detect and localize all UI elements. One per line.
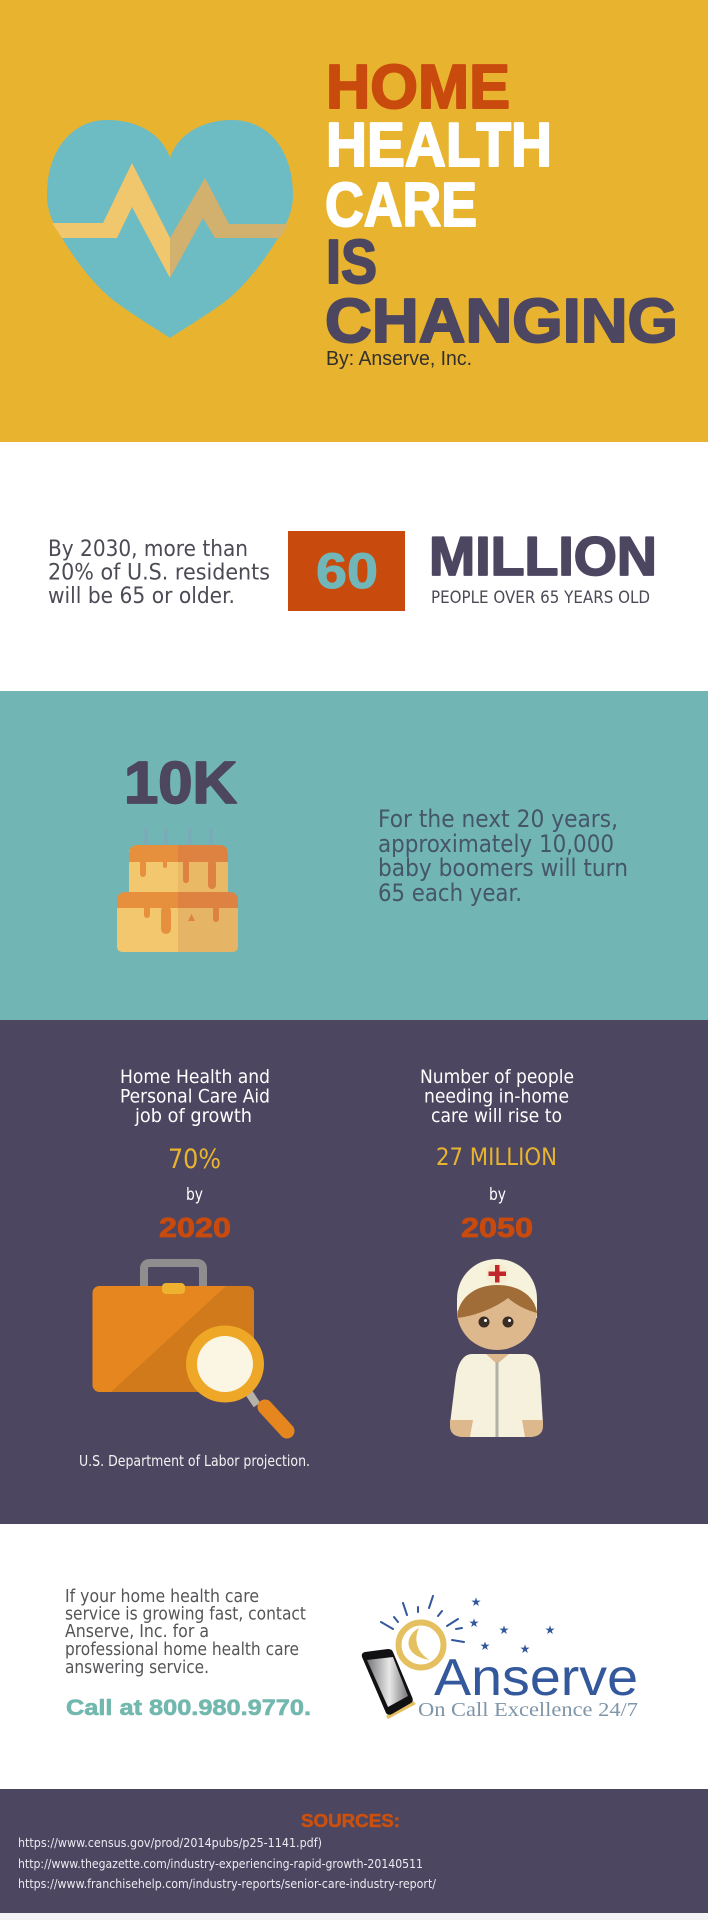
icon: birthday cake (117, 827, 238, 952)
text block: job growth (120, 1066, 270, 1127)
icon: sun and crescent moon (381, 1596, 464, 1668)
text block: 10,000 boomers: For the next 20 years, (378, 805, 618, 833)
logo: Anserve (362, 1595, 638, 1721)
source list: https://www.census.gov/prod/2014pubs/p25-1141.pdf) (18, 1836, 322, 1850)
icon: stars: ★ (545, 1623, 555, 1637)
text block: 10,000 boomers: 65 each year. (378, 879, 522, 907)
footnote: labor projection: U.S. Department of Labor projection. (79, 1452, 310, 1470)
source list: http://www.thegazette.com/industry-experiencing-rapid-growth-20140511 (18, 1857, 423, 1871)
text block: in-home care: needing in-home (424, 1086, 569, 1108)
title: CARE (325, 171, 477, 240)
stat: 2020: 2020 (159, 1212, 231, 1243)
text block: job growth: Home Health and (120, 1066, 270, 1088)
tagline: On Call Excellence 24/7 (418, 1699, 638, 1721)
text block: 2030 residents (48, 537, 270, 609)
panel: call to action (0, 1524, 708, 1789)
panel: growth statistics (0, 1020, 708, 1524)
panel: 60 million (0, 442, 708, 691)
stat word: million: MILLION (429, 525, 657, 587)
panel: sources (0, 1789, 708, 1920)
text block: contact Anserve: service is growing fast, contact (65, 1604, 306, 1624)
text block: 2030 residents: By 2030, more than (48, 537, 248, 562)
text block: 2030 residents: 20% of U.S. residents (48, 560, 270, 586)
text block: in-home care: Number of people (420, 1066, 574, 1088)
icon: stars: ★ (499, 1623, 509, 1637)
text block: job growth: Personal Care Aid (120, 1086, 270, 1108)
stat: 70%: 70% (168, 1144, 221, 1175)
text: by: by (489, 1185, 506, 1205)
stat: 27 million: 27 MILLION (436, 1143, 557, 1171)
icon: stars: ★ (469, 1616, 479, 1630)
text block: contact Anserve (65, 1586, 306, 1678)
icon: stars: ★ (471, 1595, 481, 1609)
icon: stars: ★ (480, 1639, 490, 1653)
stat box: 60: 60 (316, 543, 378, 599)
byline: By: Anserve, Inc. (326, 348, 472, 370)
title (325, 53, 678, 356)
icon: stars: ★ (520, 1642, 530, 1656)
text block: contact Anserve: answering service. (65, 1657, 209, 1678)
stat: 2050: 2050 (461, 1212, 533, 1243)
text block: 10,000 boomers (378, 805, 628, 907)
source list (18, 1836, 437, 1891)
icon: briefcase with magnifier (92, 1263, 287, 1431)
wordmark: Anserve (434, 1649, 638, 1707)
stat box: 60 (288, 531, 405, 611)
panel: 10K baby boomers (0, 691, 708, 1020)
icon: nurse (450, 1259, 543, 1437)
stat: 10K: 10K (124, 750, 237, 816)
icon: stars (469, 1595, 555, 1656)
icon: heart with pulse (47, 120, 293, 338)
panel: header (0, 0, 708, 442)
text block: in-home care: care will rise to (431, 1105, 562, 1127)
stat caption: PEOPLE OVER 65 YEARS OLD (431, 588, 650, 608)
text block: contact Anserve: professional home health care (65, 1639, 299, 1660)
title: HEALTH (326, 111, 552, 180)
title: HOME (326, 53, 510, 122)
text block: in-home care (420, 1066, 574, 1127)
text block: 2030 residents: will be 65 or older. (48, 584, 235, 609)
text block: 10,000 boomers: approximately 10,000 (378, 830, 614, 858)
source list: https://www.franchisehelp.com/industry-reports/senior-care-industry-report/ (18, 1877, 437, 1891)
heading: sources: SOURCES: (301, 1811, 400, 1831)
text: by: by (186, 1185, 203, 1205)
text block: contact Anserve: Anserve, Inc. for a (65, 1621, 209, 1642)
title: IS (326, 228, 377, 297)
title: CHANGING (325, 287, 678, 356)
icon: smartphone (362, 1649, 416, 1719)
text block: job growth: job of growth (134, 1105, 252, 1127)
text block: contact Anserve: If your home health care (65, 1586, 259, 1607)
text block: 10,000 boomers: baby boomers will turn (378, 854, 628, 882)
call to action: phone number: Call at 800.980.9770. (66, 1695, 311, 1720)
